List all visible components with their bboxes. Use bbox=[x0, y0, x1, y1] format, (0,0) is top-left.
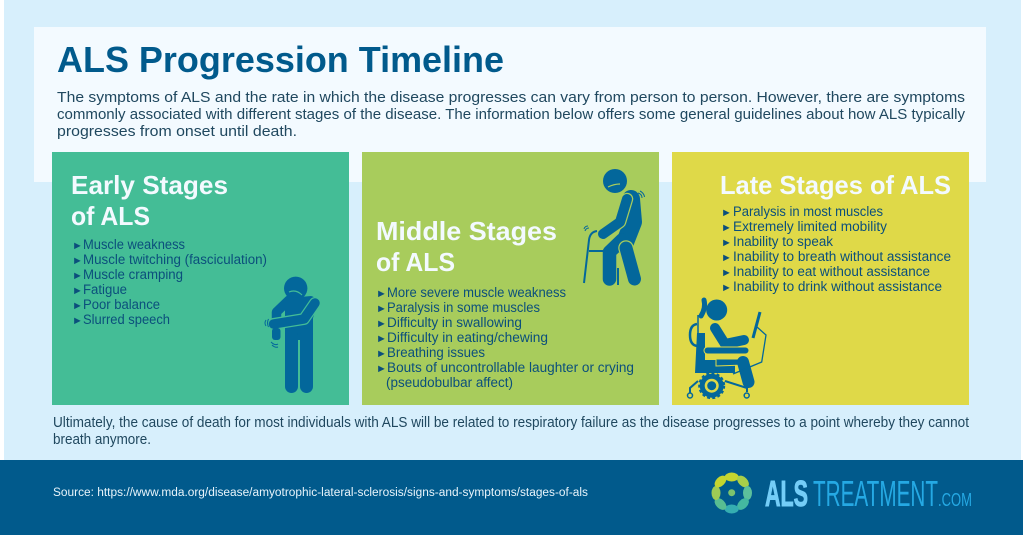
list: late symptoms: Inability to speak bbox=[733, 234, 833, 249]
source text: Source: https://www.mda.org/disease/amyotrophic-lateral-sclerosis/signs-and-symptoms/stages-of-als bbox=[53, 487, 588, 499]
list: late symptoms: ► bbox=[721, 282, 732, 294]
list: middle symptoms: Breathing issues bbox=[387, 345, 485, 360]
list: early symptoms: Fatigue bbox=[83, 282, 127, 297]
list: late symptoms: ► bbox=[721, 207, 732, 219]
list: late symptoms: Inability to drink without assistance bbox=[733, 279, 942, 294]
logo bbox=[712, 472, 972, 514]
list: middle symptoms: Difficulty in swallowing bbox=[387, 315, 522, 330]
panel: header bbox=[34, 27, 986, 182]
closing text: breath anymore. bbox=[53, 432, 151, 448]
list: late symptoms: Extremely limited mobility bbox=[733, 219, 887, 234]
heading: middle stages: Middle Stages bbox=[376, 216, 557, 246]
list: early symptoms: ► bbox=[72, 285, 83, 297]
list: early symptoms: ► bbox=[72, 315, 83, 327]
list: middle symptoms: ► bbox=[376, 348, 387, 360]
list: late symptoms: ► bbox=[721, 237, 732, 249]
footer bbox=[0, 460, 1023, 535]
logo: .COM bbox=[938, 490, 972, 510]
list: middle symptoms: (pseudobulbar affect) bbox=[386, 375, 513, 390]
list: early symptoms: ► bbox=[72, 255, 83, 267]
intro text: progresses from onset until death. bbox=[57, 124, 297, 140]
intro text bbox=[57, 90, 966, 140]
list: middle symptoms bbox=[376, 285, 634, 390]
list: early symptoms bbox=[72, 237, 267, 327]
list: early symptoms: Poor balance bbox=[83, 297, 160, 312]
logo wordmark: ALS bbox=[765, 473, 808, 514]
heading: late stages: Late Stages of ALS bbox=[720, 170, 951, 200]
list: middle symptoms: ► bbox=[376, 318, 387, 330]
icon: logo ring bbox=[712, 472, 752, 514]
list: late symptoms: Inability to breath without assistance bbox=[733, 249, 951, 264]
list: late symptoms bbox=[721, 204, 951, 294]
list: late symptoms: ► bbox=[721, 252, 732, 264]
list: early symptoms: Muscle twitching (fasciculation) bbox=[83, 252, 267, 267]
list: middle symptoms: ► bbox=[376, 303, 387, 315]
list: middle symptoms: Bouts of uncontrollable laughter or crying bbox=[387, 360, 634, 375]
closing text bbox=[53, 415, 969, 448]
heading: early stages: Early Stages bbox=[71, 170, 228, 200]
list: early symptoms: ► bbox=[72, 300, 83, 312]
list: late symptoms: ► bbox=[721, 267, 732, 279]
closing text: Ultimately, the cause of death for most individuals with ALS will be related to respiratory failure as the disease progresses to a point whereby they cannot bbox=[53, 415, 969, 431]
heading: middle stages: of ALS bbox=[376, 247, 455, 277]
list: late symptoms: ► bbox=[721, 222, 732, 234]
panel: middle stages bbox=[362, 152, 659, 405]
icon: person with walker bbox=[584, 169, 644, 285]
list: early symptoms: ► bbox=[72, 270, 83, 282]
list: middle symptoms: ► bbox=[376, 363, 387, 375]
list: early symptoms: Slurred speech bbox=[83, 312, 170, 327]
icon: person with twitching arm bbox=[265, 277, 318, 393]
list: middle symptoms: ► bbox=[376, 333, 387, 345]
list: early symptoms: Muscle weakness bbox=[83, 237, 185, 252]
icon: person in wheelchair bbox=[688, 300, 766, 398]
panel: early stages bbox=[52, 152, 349, 405]
list: middle symptoms: Paralysis in some muscles bbox=[387, 300, 540, 315]
list: early symptoms: ► bbox=[72, 240, 83, 252]
heading: early stages: of ALS bbox=[71, 201, 150, 231]
list: middle symptoms: ► bbox=[376, 288, 387, 300]
list: middle symptoms: More severe muscle weakness bbox=[387, 285, 566, 300]
intro text: The symptoms of ALS and the rate in which the disease progresses can vary from person to person. However, there are symptoms bbox=[57, 90, 965, 106]
heading: early stages bbox=[71, 170, 228, 231]
list: middle symptoms: Difficulty in eating/chewing bbox=[387, 330, 548, 345]
intro text: commonly associated with different stages of the disease. The information below offers some general guidelines about how ALS typically bbox=[57, 107, 966, 123]
list: late symptoms: Paralysis in most muscles bbox=[733, 204, 883, 219]
list: early symptoms: Muscle cramping bbox=[83, 267, 183, 282]
list: late symptoms: Inability to eat without assistance bbox=[733, 264, 930, 279]
title: ALS Progression Timeline bbox=[57, 39, 504, 80]
heading: middle stages bbox=[376, 216, 557, 277]
panel: late stages bbox=[672, 152, 969, 405]
